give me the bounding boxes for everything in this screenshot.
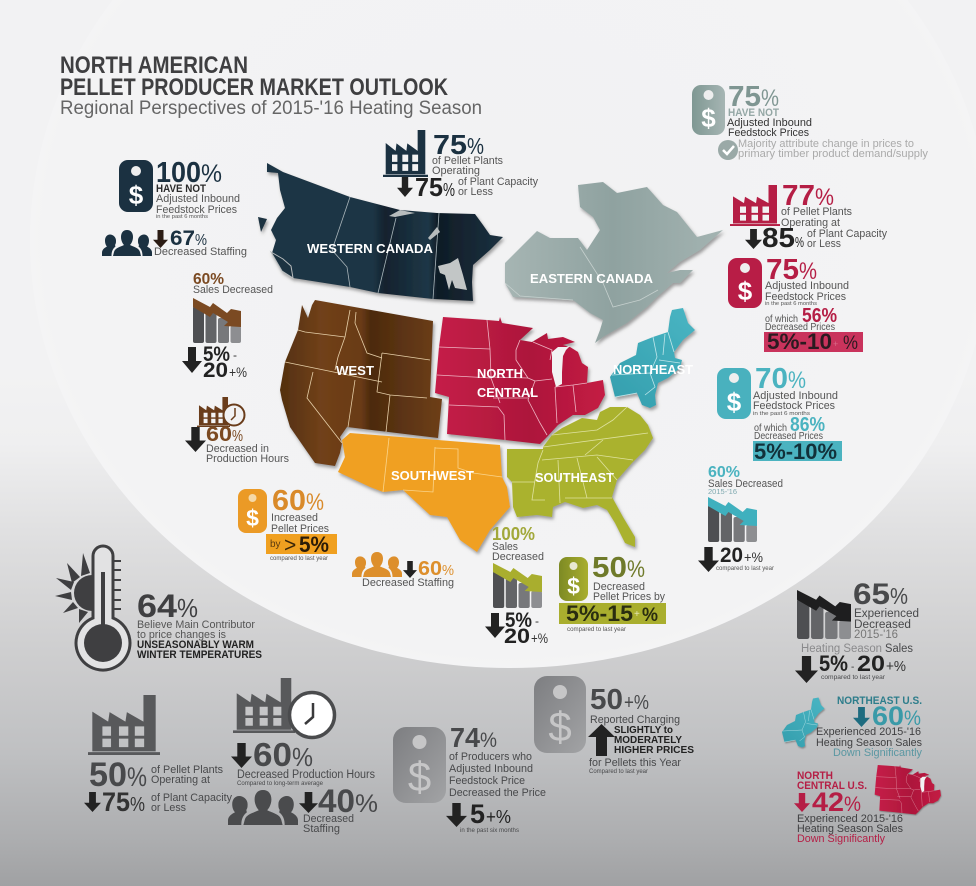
bar chart icon olive xyxy=(493,563,542,608)
panel: Southeast sales xyxy=(485,524,548,648)
map labels: NORTH xyxy=(477,366,523,381)
range box: % xyxy=(642,605,658,626)
panel: overall feedstock price: of Producers who xyxy=(449,751,532,763)
panel: North Central plants: of Plant Capacity xyxy=(807,228,887,240)
range box: 5%-10 xyxy=(767,329,832,354)
panel: higher prices: for Pellets this Year xyxy=(589,757,681,769)
icon: large dollar tag xyxy=(393,727,446,803)
panel: overall feedstock price: Decreased the Price xyxy=(449,787,546,799)
icon: dollar tag crimson: $ xyxy=(738,276,753,306)
panel: Southeast sales: 20 xyxy=(504,625,530,648)
icon: large dollar tag: $ xyxy=(548,703,572,750)
panel: heating season sales: Experienced xyxy=(854,608,919,620)
panel: North Central feedstock: Decreased Prices xyxy=(765,322,835,333)
panel: Eastern Canada feedstock: HAVE NOT xyxy=(728,107,779,119)
panel: heating season sales: 20 xyxy=(857,651,885,676)
panel: Western Canada feedstock: Feedstock Prices xyxy=(156,204,237,216)
panel: Eastern Canada feedstock: 75 xyxy=(728,81,761,113)
panel: North Central U.S. heating sales xyxy=(794,765,941,845)
panel: Northeast feedstock: of which xyxy=(754,423,787,434)
panel: Southeast sales: +% xyxy=(531,630,548,646)
panel: North Central U.S. heating sales: CENTRAL U.S. xyxy=(797,780,867,792)
panel: Eastern Canada feedstock: % xyxy=(761,85,779,112)
icon: factory crimson xyxy=(730,185,780,226)
panel: West sales: - xyxy=(233,348,237,362)
range box: + xyxy=(634,609,640,620)
panel: Southeast sales: Decreased xyxy=(492,551,544,563)
panel: Eastern Canada feedstock: Majority attribute change in prices to xyxy=(738,138,914,150)
icon: large dollar tag: $ xyxy=(408,753,431,800)
panel: Northeast feedstock: % xyxy=(788,367,806,394)
icon: dollar tag olive: $ xyxy=(567,573,580,599)
panel: Northeast feedstock: Feedstock Prices xyxy=(753,400,835,412)
panel: Northeast feedstock xyxy=(717,363,842,464)
panel: North Central feedstock: % xyxy=(799,258,817,285)
panel: Southeast sales: - xyxy=(535,614,539,628)
panel: heating season sales: Sales xyxy=(885,643,913,655)
panel: Southeast prices: compared to last year xyxy=(567,627,626,633)
icon: people orange xyxy=(352,552,402,577)
panel: overall plants operating: 75 xyxy=(102,787,130,817)
panel: Northeast sales: 60% xyxy=(708,464,740,481)
region: Northeast xyxy=(610,308,695,408)
panel: Eastern Canada feedstock: Feedstock Prices xyxy=(728,127,809,139)
icon: factory and clock brown xyxy=(197,397,244,427)
panel: main contributor, temperature: Believe Main Contributor xyxy=(137,619,255,631)
panel: main contributor, temperature: to price changes is xyxy=(137,629,226,641)
panel: overall feedstock price: Adjusted Inbound xyxy=(449,763,533,775)
panel: Western Canada plants: % xyxy=(467,133,484,159)
panel: Western Canada staffing: % xyxy=(195,232,207,249)
range box xyxy=(559,601,666,626)
panel: overall feedstock price: Feedstock Price xyxy=(449,775,525,787)
panel: overall feedstock price: 5 xyxy=(470,799,485,829)
panel: Eastern Canada feedstock: Adjusted Inbound xyxy=(727,117,812,129)
icon: large dollar tag xyxy=(534,676,586,753)
panel: North Central feedstock: 56% xyxy=(802,305,837,327)
panel: overall plants operating xyxy=(84,695,232,817)
panel: Northeast sales: +% xyxy=(744,549,763,565)
panel: Western Canada feedstock: % xyxy=(201,160,222,188)
panel: Western Canada staffing: 67 xyxy=(170,227,195,250)
panel: West production hours: % xyxy=(232,428,243,445)
icon: people grey xyxy=(228,790,298,825)
panel: Northeast feedstock: 70 xyxy=(755,363,788,395)
panel: overall staffing: Decreased xyxy=(303,813,354,825)
panel: main contributor, temperature: UNSEASONABLY WARM xyxy=(137,639,254,651)
panel: main contributor, temperature: % xyxy=(177,593,198,623)
map labels: SOUTHWEST xyxy=(391,468,474,483)
panel: Northeast feedstock: 86% xyxy=(790,414,825,436)
panel: heating season sales: 5% xyxy=(819,651,848,676)
title: NORTH AMERICAN xyxy=(60,52,248,79)
panel: main contributor, temperature: 64 xyxy=(137,588,177,624)
panel: Western Canada plants: Operating xyxy=(432,165,480,177)
region: Southwest xyxy=(338,433,510,552)
range box: 5%-10% xyxy=(754,439,837,464)
panel: overall production hours: Compared to long-term average xyxy=(237,781,324,787)
panel: Western Canada plants: 75 xyxy=(433,129,467,160)
panel: overall plants operating: of Pellet Plants xyxy=(151,764,223,776)
panel: overall plants operating: Operating at xyxy=(151,774,210,786)
panel: Western Canada staffing: Decreased Staffing xyxy=(154,246,247,258)
panel: North Central U.S. heating sales: % xyxy=(844,793,861,816)
panel: Western Canada staffing xyxy=(102,227,247,258)
panel: overall feedstock price: in the past six months xyxy=(460,828,519,834)
title: Regional Perspectives of 2015-'16 Heating Season xyxy=(60,98,482,119)
panel: Northeast sales: compared to last year xyxy=(716,566,774,572)
panel: Western Canada plants: % xyxy=(443,180,455,200)
panel: overall feedstock price: % xyxy=(480,729,497,752)
range box: % xyxy=(843,333,858,354)
panel: Southwest prices: % xyxy=(306,489,324,516)
panel: North Central plants: % xyxy=(795,234,804,251)
panel: heating season sales: Decreased xyxy=(854,619,911,631)
panel: Western Canada feedstock: in the past 6 months xyxy=(156,214,209,220)
panel: Northeast feedstock: Adjusted Inbound xyxy=(753,390,838,402)
panel: Western Canada plants xyxy=(383,129,538,202)
panel: Northeast U.S. heating sales: NORTHEAST U.S. xyxy=(837,695,922,707)
panel: overall production hours xyxy=(231,678,375,787)
panel: North Central U.S. heating sales: NORTH xyxy=(797,770,833,782)
panel: North Central U.S. heating sales: Experienced 2015-'16 xyxy=(797,813,903,825)
range box: 5% xyxy=(299,532,329,557)
panel: North Central plants: Operating at xyxy=(781,217,840,229)
panel: North Central U.S. heating sales: Heating Season Sales xyxy=(797,823,903,835)
panel: higher prices: 50 xyxy=(590,684,623,716)
panel: Western Canada plants: of Pellet Plants xyxy=(432,155,503,167)
panel: Western Canada feedstock: HAVE NOT xyxy=(156,183,206,195)
panel: higher prices: Compared to last year xyxy=(589,769,648,775)
icon: mini map Northeast xyxy=(782,698,824,748)
panel: Western Canada plants: or Less xyxy=(458,186,493,198)
panel: heating season sales: 65 xyxy=(853,578,890,611)
icon: people navy xyxy=(102,230,152,256)
panel: Northeast U.S. heating sales: Down Significantly xyxy=(833,747,922,759)
panel: Northeast feedstock: in the past 6 months xyxy=(753,411,811,417)
panel: Southeast prices: Pellet Prices by xyxy=(593,591,665,603)
icon: mini map North Central xyxy=(875,765,941,815)
panel: Southeast prices: % xyxy=(627,556,645,583)
panel: heating season sales xyxy=(795,578,919,683)
map labels: CENTRAL xyxy=(477,385,538,400)
icon: thermometer and sun xyxy=(55,546,130,670)
map labels xyxy=(307,241,693,485)
panel: Northeast sales: 20 xyxy=(720,544,743,567)
panel: overall production hours: Decreased Production Hours xyxy=(237,769,375,781)
panel: main contributor, temperature xyxy=(55,546,262,670)
panel: heating season sales: compared to last year xyxy=(821,675,885,681)
panel: North Central plants: of Pellet Plants xyxy=(781,206,852,218)
panel: overall staffing: Staffing xyxy=(303,823,340,835)
region: Eastern Canada xyxy=(505,182,723,343)
panel: West sales: 5% xyxy=(203,343,230,366)
panel: Southwest prices: Pellet Prices xyxy=(271,523,329,535)
panel: Southeast sales: 100% xyxy=(492,524,535,544)
map labels: NORTHEAST xyxy=(613,362,693,377)
panel: West sales xyxy=(182,271,273,382)
panel: Southeast prices xyxy=(559,552,666,633)
icon: dollar tag grey-green: $ xyxy=(701,103,716,133)
panel: North Central U.S. heating sales: Down Significantly xyxy=(797,833,885,845)
panel: North Central feedstock: of which xyxy=(765,314,798,325)
panel: Southwest staffing xyxy=(352,552,454,589)
panel: overall feedstock price: 74 xyxy=(450,722,480,753)
panel: higher prices: +% xyxy=(624,692,649,714)
panel: Northeast sales: 2015-'16 xyxy=(708,489,737,496)
panel: North Central plants: or Less xyxy=(807,238,841,250)
panel: Northeast sales: Sales Decreased xyxy=(708,478,783,490)
panel: North Central plants: 77 xyxy=(782,180,815,212)
panel: Northeast U.S. heating sales: % xyxy=(904,707,921,730)
panel: North Central feedstock: 75 xyxy=(766,254,799,286)
panel: Northeast feedstock: Decreased Prices xyxy=(754,431,823,442)
panel: Eastern Canada feedstock xyxy=(692,81,928,160)
panel: Southeast prices: Decreased xyxy=(593,581,645,593)
region: Southeast xyxy=(507,407,653,547)
panel: heating season sales: - xyxy=(851,662,854,673)
panel: West production hours xyxy=(185,397,289,465)
icon: dollar tag grey-green xyxy=(692,85,725,135)
panel: heating season sales: Heating Season xyxy=(801,643,882,655)
icon: factory navy xyxy=(383,130,428,177)
panel: West production hours: Decreased in xyxy=(206,443,269,455)
panel: Northeast U.S. heating sales xyxy=(782,695,922,759)
region: Western Canada xyxy=(258,163,503,301)
panel: higher prices: Reported Charging xyxy=(590,714,680,726)
panel: North Central plants: 85 xyxy=(762,222,795,253)
panel: Southeast prices: 50 xyxy=(592,552,627,584)
panel: heating season sales: 2015-'16 xyxy=(854,629,898,641)
panel: Northeast U.S. heating sales: Experienced 2015-'16 xyxy=(816,726,921,738)
panel: overall feedstock price xyxy=(393,722,546,834)
panel: North Central feedstock: in the past 6 months xyxy=(765,301,818,307)
panel: overall staffing: 40 xyxy=(318,783,355,819)
panel: Southeast sales: 5% xyxy=(505,609,532,632)
panel: Southwest prices xyxy=(238,485,337,562)
icon: check mark xyxy=(718,140,738,160)
map labels: WEST xyxy=(336,363,374,378)
panel: Southeast sales: Sales xyxy=(492,541,518,553)
range box: > xyxy=(284,534,296,557)
panel: West sales: 60% xyxy=(193,271,224,288)
icon: dollar tag navy: $ xyxy=(129,180,144,210)
range box: by xyxy=(270,539,281,550)
panel: North Central plants xyxy=(730,180,887,253)
icon: factory and clock xyxy=(233,678,334,738)
range box xyxy=(266,532,337,557)
icon: factory grey xyxy=(88,695,160,755)
panel: higher prices xyxy=(534,676,694,775)
region: West xyxy=(280,300,442,466)
panel: North Central feedstock xyxy=(728,254,863,354)
icon: dollar tag teal: $ xyxy=(727,387,742,417)
panel: overall plants operating: % xyxy=(127,762,147,792)
panel: North Central plants: % xyxy=(815,184,834,211)
panel: Southwest prices: 60 xyxy=(272,485,306,517)
panel: Southwest staffing: % xyxy=(442,562,454,579)
panel: overall plants operating: of Plant Capacity xyxy=(151,792,232,804)
panel: heating season sales: % xyxy=(890,583,908,609)
panel: West production hours: Production Hours xyxy=(206,453,289,465)
panel: Western Canada feedstock xyxy=(119,157,240,220)
map labels: EASTERN CANADA xyxy=(530,271,654,286)
icon: dollar tag orange: $ xyxy=(246,505,259,531)
panel: overall staffing xyxy=(228,783,378,835)
panel: Southwest staffing: Decreased Staffing xyxy=(362,577,454,589)
panel: Northeast sales xyxy=(698,464,783,572)
panel: West sales: 20 xyxy=(203,359,228,382)
panel: North Central U.S. heating sales: 42 xyxy=(812,787,844,817)
bar chart icon black xyxy=(797,590,851,639)
panel: Western Canada feedstock: 100 xyxy=(156,157,201,189)
panel: overall production hours: 60 xyxy=(253,736,292,773)
panel: overall plants operating: % xyxy=(130,794,145,816)
panel: overall production hours: % xyxy=(292,742,313,772)
range box: + xyxy=(833,339,838,349)
region: North Central xyxy=(435,317,605,444)
panel: overall feedstock price: +% xyxy=(486,807,511,827)
panel: Western Canada plants: of Plant Capacity xyxy=(458,176,538,188)
panel: Northeast U.S. heating sales: 60 xyxy=(872,701,904,731)
panel: West sales: +% xyxy=(229,364,247,380)
panel: Southwest staffing: 60 xyxy=(418,558,442,580)
map: North America regions xyxy=(258,163,723,552)
panel: overall plants operating: 50 xyxy=(89,756,127,794)
panel: Northeast U.S. heating sales: Heating Season Sales xyxy=(816,737,922,749)
title xyxy=(60,52,482,119)
panel: overall staffing: % xyxy=(355,790,378,818)
range box xyxy=(764,329,863,354)
panel: Western Canada feedstock: Adjusted Inbound xyxy=(156,193,240,205)
panel: Western Canada plants: 75 xyxy=(415,172,443,202)
title: PELLET PRODUCER MARKET OUTLOOK xyxy=(60,74,449,101)
bar chart icon teal xyxy=(708,497,757,542)
panel: higher prices: HIGHER PRICES xyxy=(614,744,694,756)
panel: West sales: Sales Decreased xyxy=(193,284,273,296)
panel: West production hours: 60 xyxy=(206,423,232,446)
panel: overall plants operating: or Less xyxy=(151,802,186,814)
panel: Southwest prices: compared to last year xyxy=(270,556,328,562)
panel: main contributor, temperature: WINTER TEMPERATURES xyxy=(137,649,262,661)
map labels: SOUTHEAST xyxy=(535,470,614,485)
map labels: WESTERN CANADA xyxy=(307,241,434,256)
bar chart icon brown xyxy=(193,298,241,343)
panel: higher prices: SLIGHTLY to xyxy=(614,724,673,736)
panel: heating season sales: +% xyxy=(886,658,906,675)
panel: higher prices: MODERATELY xyxy=(614,734,682,746)
panel: Eastern Canada feedstock: primary timber product demand/supply xyxy=(738,148,928,160)
panel: North Central feedstock: Feedstock Prices xyxy=(765,291,846,303)
range box: 5%-15 xyxy=(566,601,633,626)
panel: North Central feedstock: Adjusted Inbound xyxy=(765,280,849,292)
panel: Southwest prices: Increased xyxy=(271,512,318,524)
